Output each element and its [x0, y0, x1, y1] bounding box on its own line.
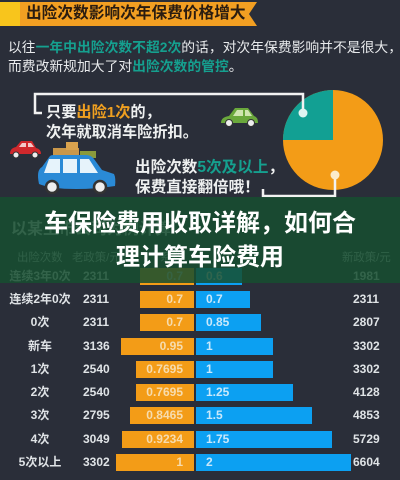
row: 2 years no claims: 连续2年0次	[9, 292, 71, 306]
row: 2 years no claims: 0.7	[166, 292, 183, 306]
row: new car: 新车	[28, 339, 52, 353]
row: 5+ claims: 6604	[353, 455, 380, 469]
row: 2 years no claims	[9, 291, 379, 308]
row: new car: 1	[206, 339, 213, 353]
row: 3 claims: 0.8465	[146, 408, 183, 422]
icon: red car	[10, 141, 41, 158]
pie chart	[283, 90, 383, 190]
row: 2 claims: 2次	[31, 385, 49, 399]
row: 4 claims: 4次	[31, 432, 49, 446]
table column headers	[17, 251, 391, 264]
green overlay band	[0, 197, 400, 283]
row: 3 years no claims: 0.7	[166, 269, 183, 283]
row: 5+ claims: 2	[206, 455, 213, 469]
row: new car: 3136	[83, 339, 110, 353]
icon: blue car with luggage	[38, 142, 116, 194]
row: 2 years no claims: 2311	[353, 292, 379, 306]
row: 3 years no claims	[9, 268, 380, 285]
row: new car	[28, 338, 380, 355]
row: 2 claims: 4128	[353, 385, 380, 399]
icon: green car	[221, 108, 258, 126]
row: new car: 3302	[353, 339, 380, 353]
callout: one claim	[46, 104, 198, 141]
row: 1 claim: 1	[206, 362, 213, 376]
callout: five claims: 出险次数5次及以上，	[135, 159, 284, 176]
row: new car: 0.95	[160, 339, 183, 353]
overlay headline	[44, 210, 356, 271]
row: 5+ claims: 1	[176, 455, 183, 469]
row: 3 years no claims: 1981	[353, 269, 380, 283]
row: 1 claim: 3302	[353, 362, 380, 376]
row: 3 claims: 3次	[31, 408, 49, 422]
row: 2 claims	[31, 384, 380, 401]
row: 2 claims: 1.25	[206, 385, 229, 399]
intro text	[8, 40, 400, 74]
callout: one claim: 次年就取消车险折扣。	[46, 124, 198, 141]
intro text: 而费改新规加大了对出险次数的管控。	[8, 59, 243, 74]
row: 2 claims: 0.7695	[146, 385, 183, 399]
callout connector lines	[34, 92, 340, 198]
row: 0 claims	[31, 314, 380, 331]
row: 3 years no claims: 连续3年0次	[9, 269, 71, 283]
row: 0 claims: 2311	[83, 315, 109, 329]
row: 2 claims: 2540	[83, 385, 110, 399]
table column headers: 新政策/元	[342, 252, 391, 264]
row: 5+ claims: 5次以上	[19, 455, 61, 469]
row: 0 claims: 0.7	[166, 315, 183, 329]
overlay headline: 理计算车险费用	[116, 244, 284, 271]
row: 1 claim: 2540	[83, 362, 110, 376]
row: 1 claim: 1次	[31, 362, 49, 376]
callout: five claims	[135, 158, 284, 196]
row: 4 claims: 5729	[353, 432, 380, 446]
table column headers: 系数	[160, 252, 183, 264]
row: 2 years no claims: 0.7	[206, 292, 223, 306]
row: 4 claims: 3049	[83, 432, 110, 446]
row: 3 claims: 4853	[353, 408, 380, 422]
row: 3 claims: 2795	[83, 408, 110, 422]
table column headers: 老政策/元	[72, 252, 121, 264]
table heading: 以某上市公司为例计算	[11, 221, 171, 238]
title banner	[0, 2, 257, 26]
row: 5+ claims: 3302	[83, 455, 110, 469]
row: 0 claims: 0次	[31, 315, 49, 329]
callout: five claims: 保费直接翻倍哦！	[135, 178, 260, 196]
row: 3 years no claims: 0.6	[206, 269, 223, 283]
table column headers: 出险次数	[17, 252, 63, 264]
row: 5+ claims	[19, 454, 380, 471]
row: 0 claims: 2807	[353, 315, 380, 329]
row: 1 claim	[31, 361, 380, 378]
row: 4 claims: 0.9234	[146, 432, 183, 446]
row: 4 claims	[30, 431, 380, 448]
row: 3 claims: 1.5	[206, 408, 223, 422]
row: 0 claims: 0.85	[206, 315, 229, 329]
row: 3 claims	[30, 407, 380, 424]
callout: one claim: 只要出险1次的，	[46, 104, 161, 121]
row: 4 claims: 1.75	[206, 432, 229, 446]
bar table	[9, 268, 380, 471]
overlay headline: 车保险费用收取详解，如何合	[44, 210, 356, 237]
intro text: 以往一年中出险次数不超2次的话，对次年保费影响并不是很大，	[8, 40, 400, 55]
row: 3 years no claims: 2311	[83, 269, 109, 283]
row: 1 claim: 0.7695	[146, 362, 183, 376]
title banner: 出险次数影响次年保费价格增大	[26, 5, 246, 22]
row: 2 years no claims: 2311	[83, 292, 109, 306]
